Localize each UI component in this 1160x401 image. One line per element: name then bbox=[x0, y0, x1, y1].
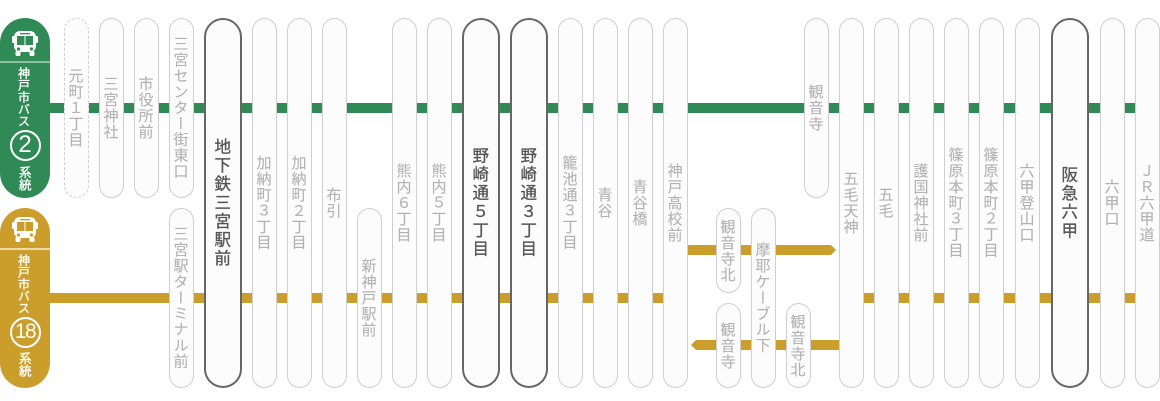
stop: 五毛 bbox=[874, 18, 899, 388]
route number 18: 18 bbox=[15, 320, 35, 343]
stop: 元町1丁目: 元町１丁目 bbox=[66, 68, 84, 148]
stop: 青谷橋: 青谷橋 bbox=[630, 179, 648, 227]
stop: 篠原本町3丁目: 篠原本町３丁目 bbox=[946, 147, 964, 259]
stop: 地下鉄三宮駅前 bbox=[204, 18, 242, 388]
stop: 市役所前 bbox=[134, 18, 159, 198]
stop: 観音寺 upper: 観音寺 bbox=[806, 84, 824, 132]
stop: 三宮神社: 三宮神社 bbox=[102, 76, 118, 140]
stop: 野崎通5丁目: 野崎通５丁目 bbox=[470, 147, 488, 259]
stop: 布引 bbox=[322, 18, 347, 388]
stop: 三宮駅ターミナル前: 三宮駅ターミナル前 bbox=[172, 226, 188, 370]
stop: 観音寺 westbound: 観音寺 bbox=[718, 322, 736, 369]
route badge: 18 bbox=[0, 208, 50, 388]
stop: 市役所前: 市役所前 bbox=[136, 76, 154, 140]
stop: 護国神社前 bbox=[909, 18, 934, 388]
icon: bus bbox=[12, 217, 38, 242]
stop: 三宮センター街東口: 三宮センター街東口 bbox=[172, 36, 188, 180]
stop: 三宮神社 bbox=[99, 18, 124, 198]
stop: 観音寺北 westbound: 観音寺北 bbox=[788, 314, 806, 377]
stop: 観音寺 upper bbox=[804, 18, 829, 198]
stop: 野崎通3丁目: 野崎通３丁目 bbox=[518, 147, 536, 259]
stop: 神戸高校前 bbox=[663, 18, 688, 388]
stop: 籠池通3丁目: 籠池通３丁目 bbox=[560, 155, 578, 251]
stop: 熊内5丁目 bbox=[427, 18, 452, 388]
stop: 野崎通5丁目 bbox=[462, 18, 500, 388]
route line: 2 green bbox=[50, 103, 1135, 113]
text: 系統: 系統 bbox=[17, 166, 31, 190]
text: 神戸市バス: 神戸市バス bbox=[16, 254, 30, 314]
stop: 六甲口 bbox=[1100, 18, 1125, 388]
stop: 六甲登山口: 六甲登山口 bbox=[1018, 163, 1034, 243]
stop: 加納町2丁目 bbox=[287, 18, 312, 388]
stop: 五毛天神: 五毛天神 bbox=[842, 171, 858, 235]
stop: 観音寺北 westbound bbox=[786, 303, 811, 388]
route badge: 2 bbox=[0, 18, 50, 198]
stop: 摩耶ケーブル下: 摩耶ケーブル下 bbox=[754, 242, 770, 354]
stop: 野崎通3丁目 bbox=[510, 18, 548, 388]
stop: 篠原本町2丁目: 篠原本町２丁目 bbox=[982, 147, 998, 259]
stop: 三宮センター街東口 bbox=[169, 18, 194, 198]
route number 18 bbox=[10, 317, 40, 348]
stop: 新神戸駅前 bbox=[357, 208, 382, 388]
stop: 神戸高校前: 神戸高校前 bbox=[666, 163, 682, 243]
stop: 観音寺北 eastbound: 観音寺北 bbox=[718, 219, 736, 282]
route number 2: 2 bbox=[18, 130, 32, 158]
stop: 六甲登山口 bbox=[1015, 18, 1040, 388]
stop: 阪急六甲 bbox=[1051, 18, 1089, 388]
stop: 青谷: 青谷 bbox=[596, 187, 612, 219]
route line: 18 gold main bbox=[50, 293, 1135, 303]
text: 神戸市バス: 神戸市バス bbox=[16, 67, 30, 127]
arrow: gold branch eastbound bbox=[688, 245, 836, 255]
stop: 摩耶ケーブル下 bbox=[751, 208, 776, 388]
arrow: gold branch westbound bbox=[691, 340, 839, 350]
stop: 加納町3丁目: 加納町３丁目 bbox=[254, 155, 272, 251]
stop: 新神戸駅前: 新神戸駅前 bbox=[360, 258, 376, 338]
stop: 五毛: 五毛 bbox=[876, 187, 894, 219]
stop: 地下鉄三宮駅前: 地下鉄三宮駅前 bbox=[212, 138, 230, 268]
stop: 篠原本町3丁目 bbox=[944, 18, 969, 388]
stop: 阪急六甲: 阪急六甲 bbox=[1059, 166, 1077, 240]
stop: 五毛天神 bbox=[839, 18, 864, 388]
divider bbox=[0, 248, 50, 250]
divider bbox=[0, 61, 50, 63]
stop: 青谷 bbox=[593, 18, 618, 388]
stop: 籠池通3丁目 bbox=[558, 18, 583, 388]
stop: 熊内6丁目: 熊内６丁目 bbox=[394, 163, 412, 243]
icon: bus bbox=[12, 31, 38, 56]
stop: 六甲口: 六甲口 bbox=[1102, 179, 1120, 227]
stop: 加納町2丁目: 加納町２丁目 bbox=[290, 155, 306, 251]
route number 2 bbox=[10, 130, 40, 160]
stop: 観音寺北 eastbound bbox=[716, 208, 741, 293]
stop: 青谷橋 bbox=[628, 18, 653, 388]
stop: 篠原本町2丁目 bbox=[979, 18, 1004, 388]
stop: 護国神社前: 護国神社前 bbox=[912, 163, 928, 243]
stop: 布引: 布引 bbox=[324, 187, 342, 219]
stop: JR六甲道 bbox=[1135, 18, 1160, 388]
stop: 三宮駅ターミナル前 bbox=[169, 208, 194, 388]
stop: 熊内5丁目: 熊内５丁目 bbox=[430, 163, 446, 243]
stop: 加納町3丁目 bbox=[252, 18, 277, 388]
stop: 観音寺 westbound bbox=[716, 303, 741, 388]
stop: JR六甲道: ＪＲ六甲道 bbox=[1138, 163, 1154, 243]
stop: 熊内6丁目 bbox=[392, 18, 417, 388]
text: 系統: 系統 bbox=[17, 352, 31, 376]
gap covering gold line between branches bbox=[688, 293, 839, 303]
stop: 元町1丁目 bbox=[64, 18, 89, 198]
